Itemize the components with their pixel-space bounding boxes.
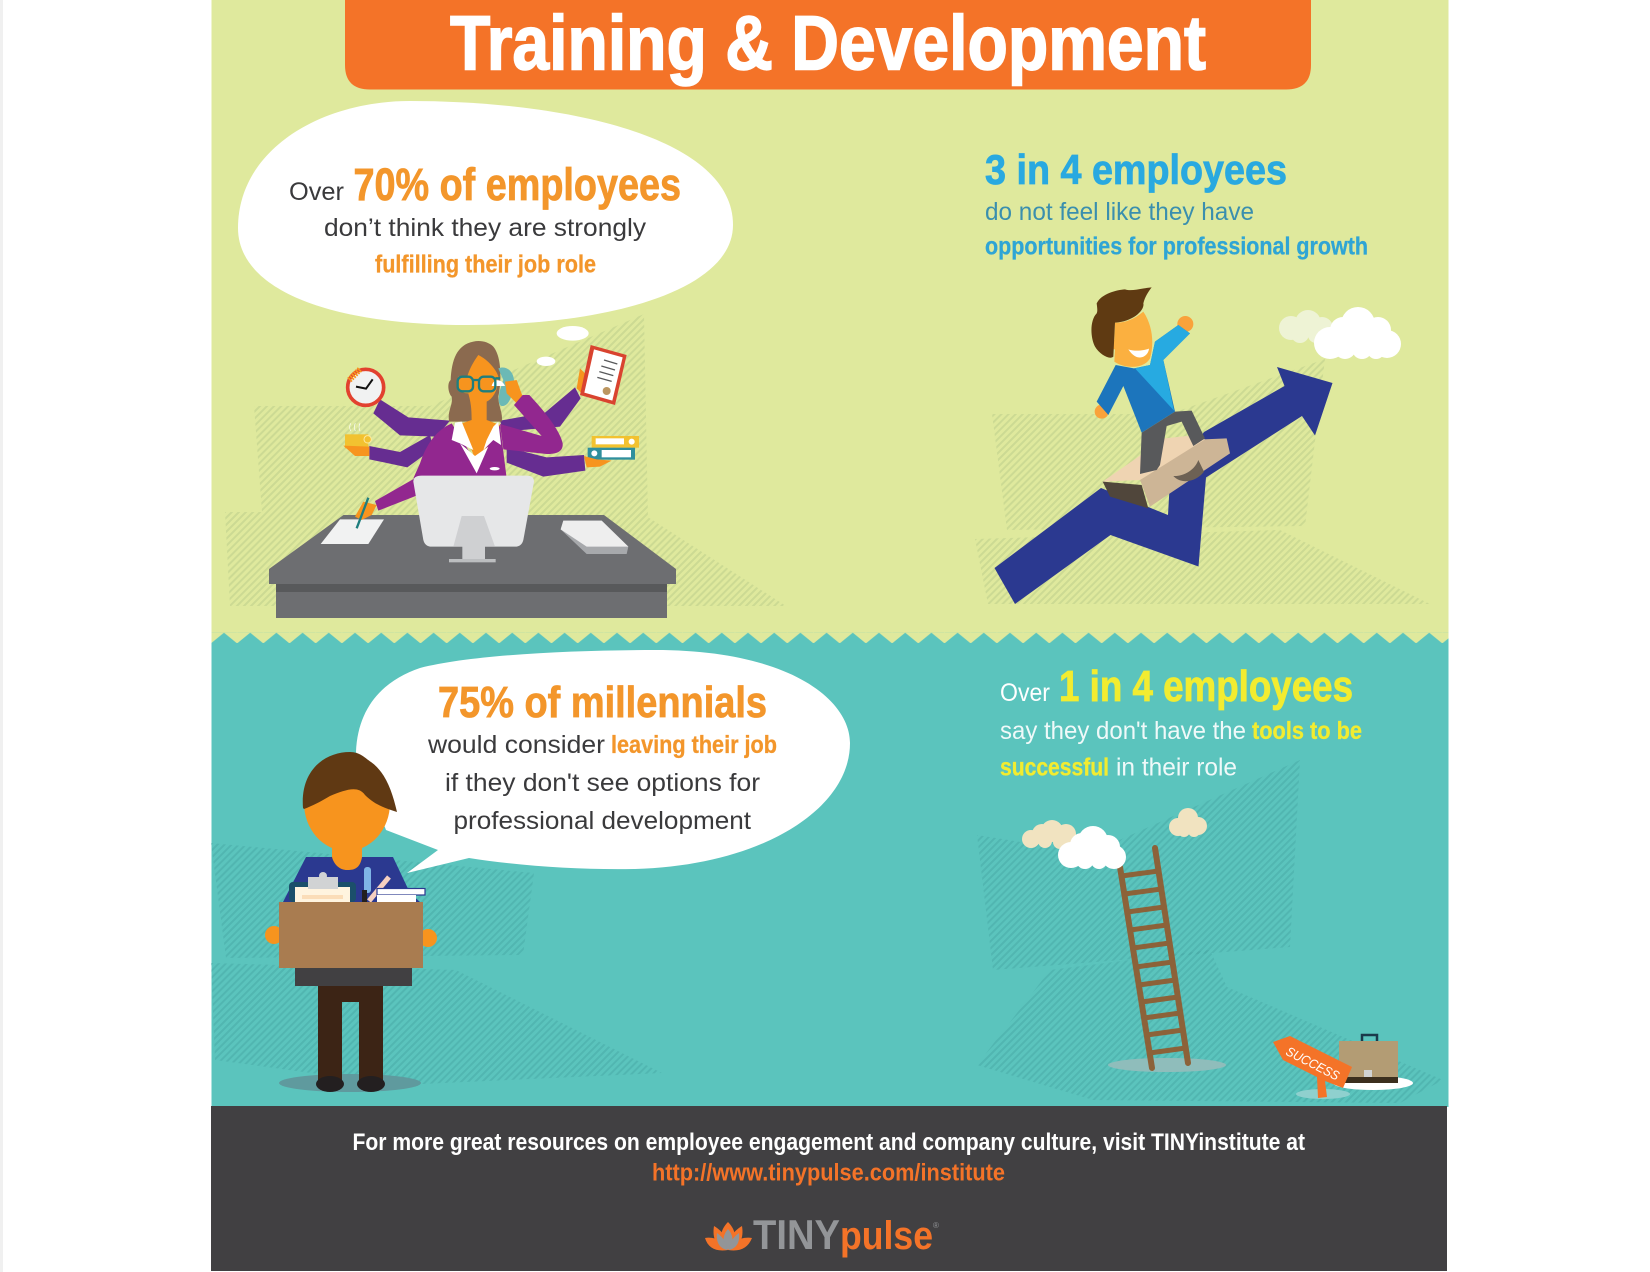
hair: [303, 752, 397, 812]
text: if they don't see options for: if they don't see options for: [445, 769, 760, 797]
head: [1106, 312, 1152, 367]
waist: [295, 968, 412, 986]
ladder shadow: [1108, 1058, 1226, 1072]
wordmark: pulse: [840, 1214, 933, 1258]
cardboard box: [279, 902, 423, 968]
glasses: [458, 377, 500, 391]
stat: 3 in 4 employees: 3 in 4 employees: [985, 146, 1287, 193]
stat: over 1 in 4 employees: Over: [1000, 679, 1050, 707]
hair: [448, 341, 502, 422]
white cloud: [1058, 826, 1126, 869]
torso and arms: [1097, 325, 1190, 433]
wordmark: ®: [933, 1221, 939, 1230]
box contents: [289, 867, 425, 902]
text: professional development: professional development: [454, 807, 751, 835]
text: say they don't have the tools to be: say they don't have the: [1000, 717, 1246, 745]
text: fulfilling their job role: fulfilling their job role: [375, 250, 596, 278]
panel: 70% of employees speech bubble: [238, 101, 733, 325]
text: say they don't have the tools to be: tools to be: [1252, 717, 1362, 745]
phone: [498, 367, 514, 406]
success sign: SUCCESS: [1284, 1044, 1342, 1083]
paper stack: [561, 521, 628, 554]
footer text: [352, 1129, 1305, 1186]
face: [458, 355, 500, 463]
stat: over 70% of employees: Over: [289, 178, 344, 206]
phone arm: [500, 395, 563, 454]
title: Training & Development: [450, 0, 1206, 86]
jacket: [413, 423, 507, 478]
text: url: http://www.tinypulse.com/institute: [652, 1160, 1005, 1186]
coffee cup: [343, 423, 371, 456]
panel: green top background: [212, 0, 1448, 645]
writing hand and pen: [355, 498, 377, 528]
panel: 75% of millennials speech bubble: [356, 650, 850, 873]
text: would consider leaving their job: leaving their job: [611, 731, 777, 759]
wordmark: TINY: [753, 1211, 840, 1258]
stat: 75% of millennials: 75% of millennials: [438, 678, 767, 727]
text: successful in their role: successful: [1000, 754, 1109, 782]
lower arm with pen: [375, 478, 421, 511]
shirt: [283, 857, 420, 902]
cream cloud left: [1022, 820, 1078, 849]
back arms: [369, 387, 585, 477]
paper under pen: [321, 519, 384, 544]
title banner: [345, 0, 1311, 90]
stat: over 70% of employees: 70% of employees: [354, 159, 681, 210]
panel: 3 in 4 employees text: [985, 146, 1368, 261]
illustration: man carrying box: [265, 752, 437, 1092]
text: resources line: For more great resources on employee engagement and company culture, visit TINYinstitute at: [352, 1129, 1305, 1156]
trousers: [1140, 411, 1205, 474]
text: would consider leaving their job: [427, 731, 777, 759]
clipboard: [577, 345, 627, 405]
briefcase board: [1103, 436, 1230, 508]
text: don't think they are strongly: don’t think they are strongly: [324, 214, 647, 242]
head and neck: [304, 755, 390, 870]
icon: clouds top right: [1279, 307, 1401, 359]
clock: [348, 369, 384, 405]
panel: teal bottom background: [212, 633, 1448, 1107]
logo: TINYpulse: [705, 1211, 939, 1258]
smile: [1128, 349, 1149, 357]
folders: [584, 436, 639, 467]
text: successful in their role: [1000, 754, 1237, 782]
hands: [265, 926, 437, 947]
phone hand: [505, 380, 523, 403]
text: would consider leaving their job: would consider: [427, 731, 605, 759]
monitor: [413, 476, 534, 562]
thought bubbles: [537, 326, 589, 366]
illustration: ladder into clouds: [1022, 808, 1226, 1072]
cream cloud right: [1169, 808, 1207, 837]
arrow: rising growth arrow: [994, 367, 1332, 604]
shadow: [279, 1074, 421, 1092]
illustration: multitasking woman: [321, 326, 639, 562]
shoes: [316, 1076, 385, 1092]
illustration: desk: [269, 515, 676, 618]
briefcase: [1339, 1035, 1398, 1083]
wordmark: [753, 1211, 939, 1258]
text: successful in their role: in their role: [1116, 754, 1237, 782]
ladder: [1120, 848, 1188, 1068]
text: opportunities for professional growth: opportunities for professional growth: [985, 233, 1368, 261]
hair: [1091, 287, 1152, 358]
hands: [1095, 316, 1193, 419]
panel: footer background: [211, 1106, 1447, 1271]
stat: over 1 in 4 employees: 1 in 4 employees: [1059, 662, 1353, 711]
icon: lotus: [705, 1222, 752, 1250]
illustration: briefcase and success sign: [1273, 1035, 1413, 1099]
shirt and collar: [452, 422, 501, 473]
text: do not feel like they have: do not feel like they have: [985, 198, 1254, 226]
legs: [318, 986, 383, 1080]
panel: 1 in 4 employees text: [1000, 662, 1362, 782]
illustration: man surfing on briefcase: [1091, 287, 1230, 508]
